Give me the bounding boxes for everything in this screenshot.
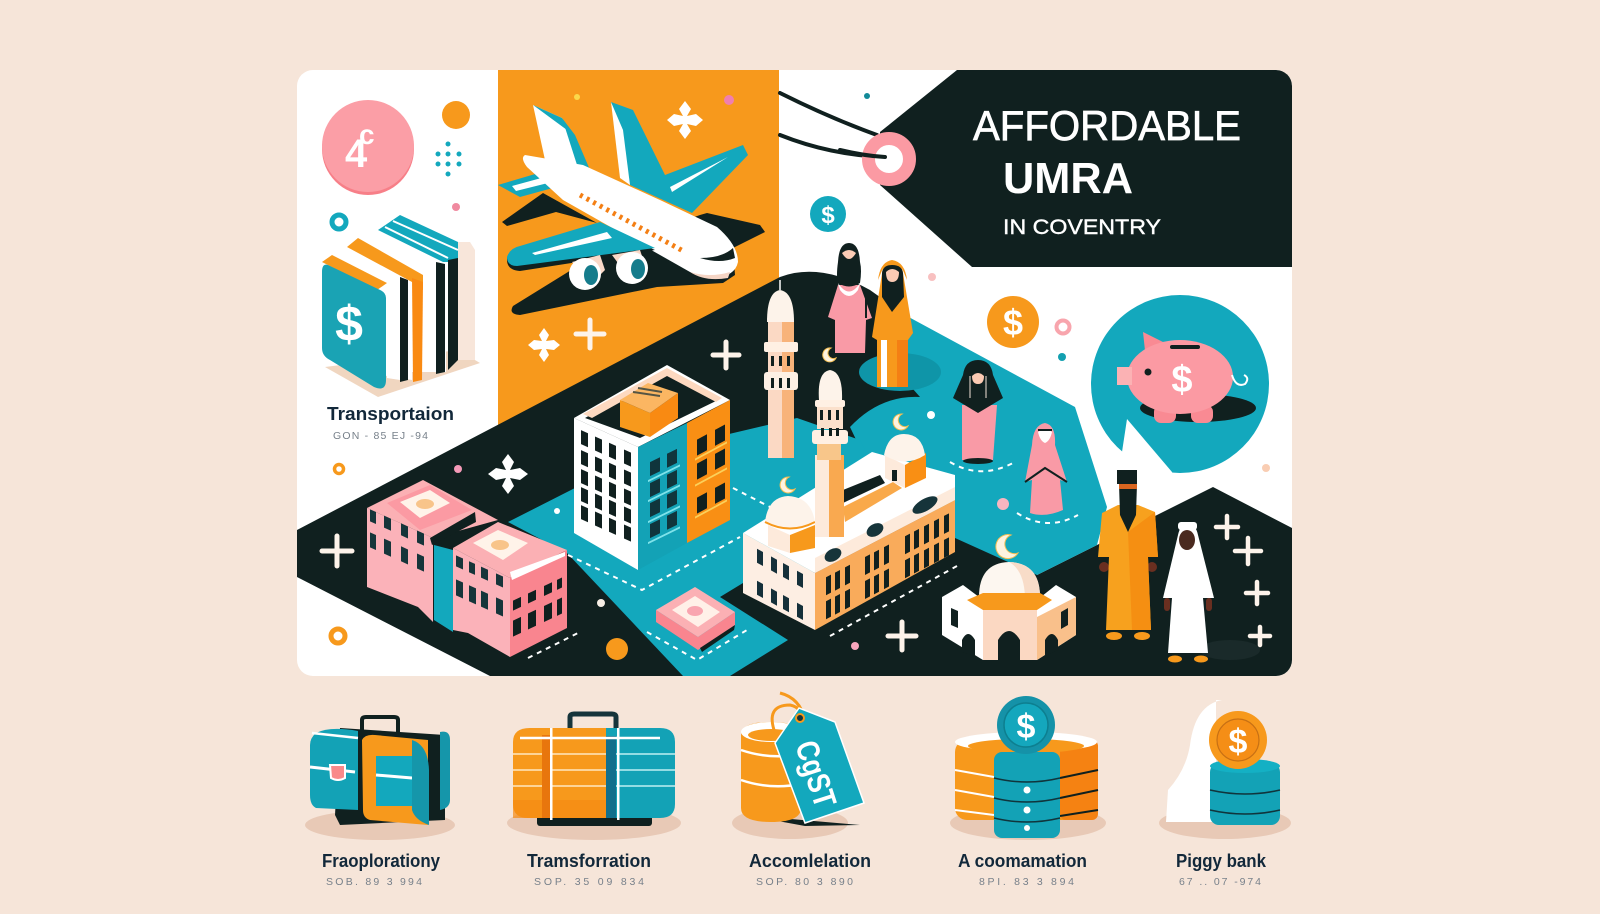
piggy bank [1117,332,1256,423]
figure: woman in black veil [953,360,1003,464]
hotel windows left [581,430,631,542]
panel: orange plane background [498,70,779,426]
big mosque [743,370,955,630]
label 3: SOP. 80 3 890 [756,876,853,888]
dark ground [297,272,1292,676]
dashed paths [528,462,1078,660]
hotel windows teal face [648,447,680,544]
pink hotel windows [370,509,424,572]
dollar tag shape with title [780,70,1292,267]
coins [574,93,1070,361]
coins: $ [1003,302,1023,343]
label 5: 67 .. 07 -974 [1179,876,1261,888]
icon: pink coin [322,100,414,195]
label 3: Accomlelation [749,851,871,871]
near minaret [812,370,848,537]
title [973,102,1241,239]
label 5: Piggy bank [1176,851,1267,871]
label 1: Fraoplorationy [322,851,440,871]
icon: teal suitcase [305,717,455,840]
icon: airplane [498,102,765,315]
title: IN COVENTRY [1003,216,1161,239]
mosque windows [826,513,949,619]
label: Transportation: GON - 85 EJ -94 [333,430,428,442]
title: UMRA [1003,154,1133,203]
small mosque [942,562,1076,660]
label 3 [749,851,871,888]
label 4 [958,851,1087,888]
tag strings [780,93,885,157]
icon: pink coin: c [359,119,375,150]
icon: orange and teal case [507,714,681,840]
tail fin [533,105,577,164]
teal ground left [508,418,885,676]
icon: stack of books with dollar [322,215,480,397]
figure: woman in pink hood [1025,423,1067,515]
figure: man in white [1163,522,1260,662]
main illustration panel [297,70,1292,676]
wing [507,248,655,271]
icon: coin on teal stack: $ [1229,723,1248,761]
engines [569,250,648,290]
building: pink hotel [367,480,567,657]
windows [580,195,685,252]
building: tall hotel [574,365,730,570]
label 2: SOP. 35 09 834 [534,876,644,888]
left dome [765,496,815,553]
decorative dots top left [331,101,470,643]
plane shadow [502,193,765,315]
tag ring [840,138,910,180]
piggy bank: $ [1171,359,1193,401]
icon: price tag with coins [732,693,864,839]
label 1 [322,851,440,888]
fuselage [523,155,738,278]
icon: coin stacks: $ [1017,708,1036,746]
hotel windows orange face [695,423,727,519]
far minaret [764,280,798,458]
small dots ground [554,411,1270,660]
label 4: 8PI. 83 3 894 [979,876,1074,888]
sparkles [488,101,703,494]
coins: $ [821,202,835,229]
figure: woman in orange [859,260,941,391]
label 2: Tramsforration [527,851,651,871]
label 1: SOB. 89 3 994 [326,876,422,888]
icon: coin stacks [950,696,1106,840]
label 5 [1176,851,1267,888]
speech bubble with piggy bank [1091,295,1269,490]
small pink tile [656,587,735,652]
icon: price tag with coins: CgST [788,736,844,812]
figure: man in orange [1098,470,1158,640]
icon: coin on teal stack [1159,700,1291,839]
title: AFFORDABLE [973,102,1241,149]
arches [824,496,938,562]
label 2 [527,851,651,888]
label 4: A coomamation [958,851,1087,871]
figure: woman in pink [828,243,872,353]
label: Transportation: Transportaion [327,404,454,424]
label: Transportation [327,406,453,439]
icon: stack of books with dollar: $ [335,296,363,352]
crescents [780,348,1018,559]
teal ground right [850,315,1107,575]
icon: pink coin: 4 [345,132,368,176]
right dome [884,434,926,488]
plus signs [322,320,1270,650]
